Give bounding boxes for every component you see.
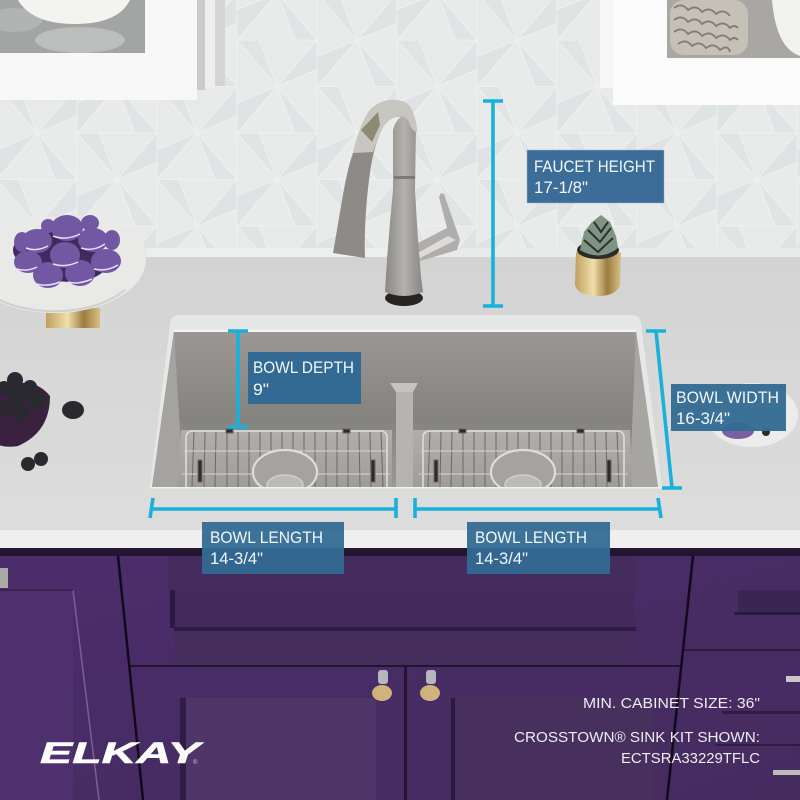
label: left bowl length — [202, 522, 344, 574]
label: bowl width: BOWL WIDTH — [676, 389, 779, 407]
cabinet gaps — [118, 556, 693, 800]
faucet handle — [414, 193, 460, 261]
dimension: bowl width — [646, 331, 682, 488]
logo: Elkay: ELKAY — [40, 737, 205, 770]
cabinet size and kit note: CROSSTOWN® SINK KIT SHOWN: — [514, 729, 760, 746]
label: bowl width: 16-3/4" — [676, 410, 730, 428]
label: bowl depth: 9" — [253, 381, 269, 399]
center drawer panel — [168, 556, 638, 665]
left grate — [182, 428, 390, 487]
tile backsplash — [0, 0, 800, 258]
label: faucet height: 17-1/8" — [534, 179, 588, 197]
knobs — [372, 670, 440, 701]
label: bowl width — [671, 384, 786, 431]
center divider — [390, 383, 418, 487]
sink basin — [152, 331, 658, 487]
dimension: right bowl length — [415, 498, 661, 518]
sink rim — [150, 315, 662, 487]
dimension: bowl depth — [228, 331, 248, 427]
upper cabinet right — [600, 0, 800, 105]
upper cabinet left — [0, 0, 225, 100]
cabinet size and kit note: MIN. CABINET SIZE: 36" — [583, 695, 760, 712]
succulent in gold pot — [575, 215, 621, 296]
label: bowl depth: BOWL DEPTH — [253, 359, 354, 377]
countertop — [0, 248, 800, 548]
blackberry bowl — [0, 372, 84, 471]
logo: Elkay — [40, 737, 205, 770]
dimension: faucet height — [483, 101, 503, 306]
sink — [150, 315, 662, 501]
label: left bowl length: BOWL LENGTH — [210, 529, 323, 547]
logo: Elkay: ® — [193, 759, 198, 766]
base cabinets — [0, 548, 800, 800]
macaron stand — [0, 215, 146, 328]
faucet — [333, 100, 460, 306]
cabinet size and kit note: ECTSRA33229TFLC — [621, 750, 760, 767]
left cabinet door — [0, 568, 99, 800]
label: faucet height — [527, 150, 664, 203]
label: right bowl length — [467, 522, 610, 574]
label: right bowl length: 14-3/4" — [475, 550, 528, 568]
bowl floor — [178, 430, 632, 487]
cabinet size and kit note — [514, 695, 760, 767]
label: faucet height: FAUCET HEIGHT — [534, 158, 655, 176]
label: left bowl length: 14-3/4" — [210, 550, 263, 568]
right grate — [419, 428, 628, 487]
right cabinet drawers — [684, 590, 800, 775]
label: bowl depth — [248, 352, 361, 404]
label: right bowl length: BOWL LENGTH — [475, 529, 587, 547]
cabinet doors — [130, 665, 682, 800]
macarons — [13, 215, 121, 288]
dimension: left bowl length — [150, 498, 396, 518]
small plate behind bowl width label — [706, 383, 798, 447]
